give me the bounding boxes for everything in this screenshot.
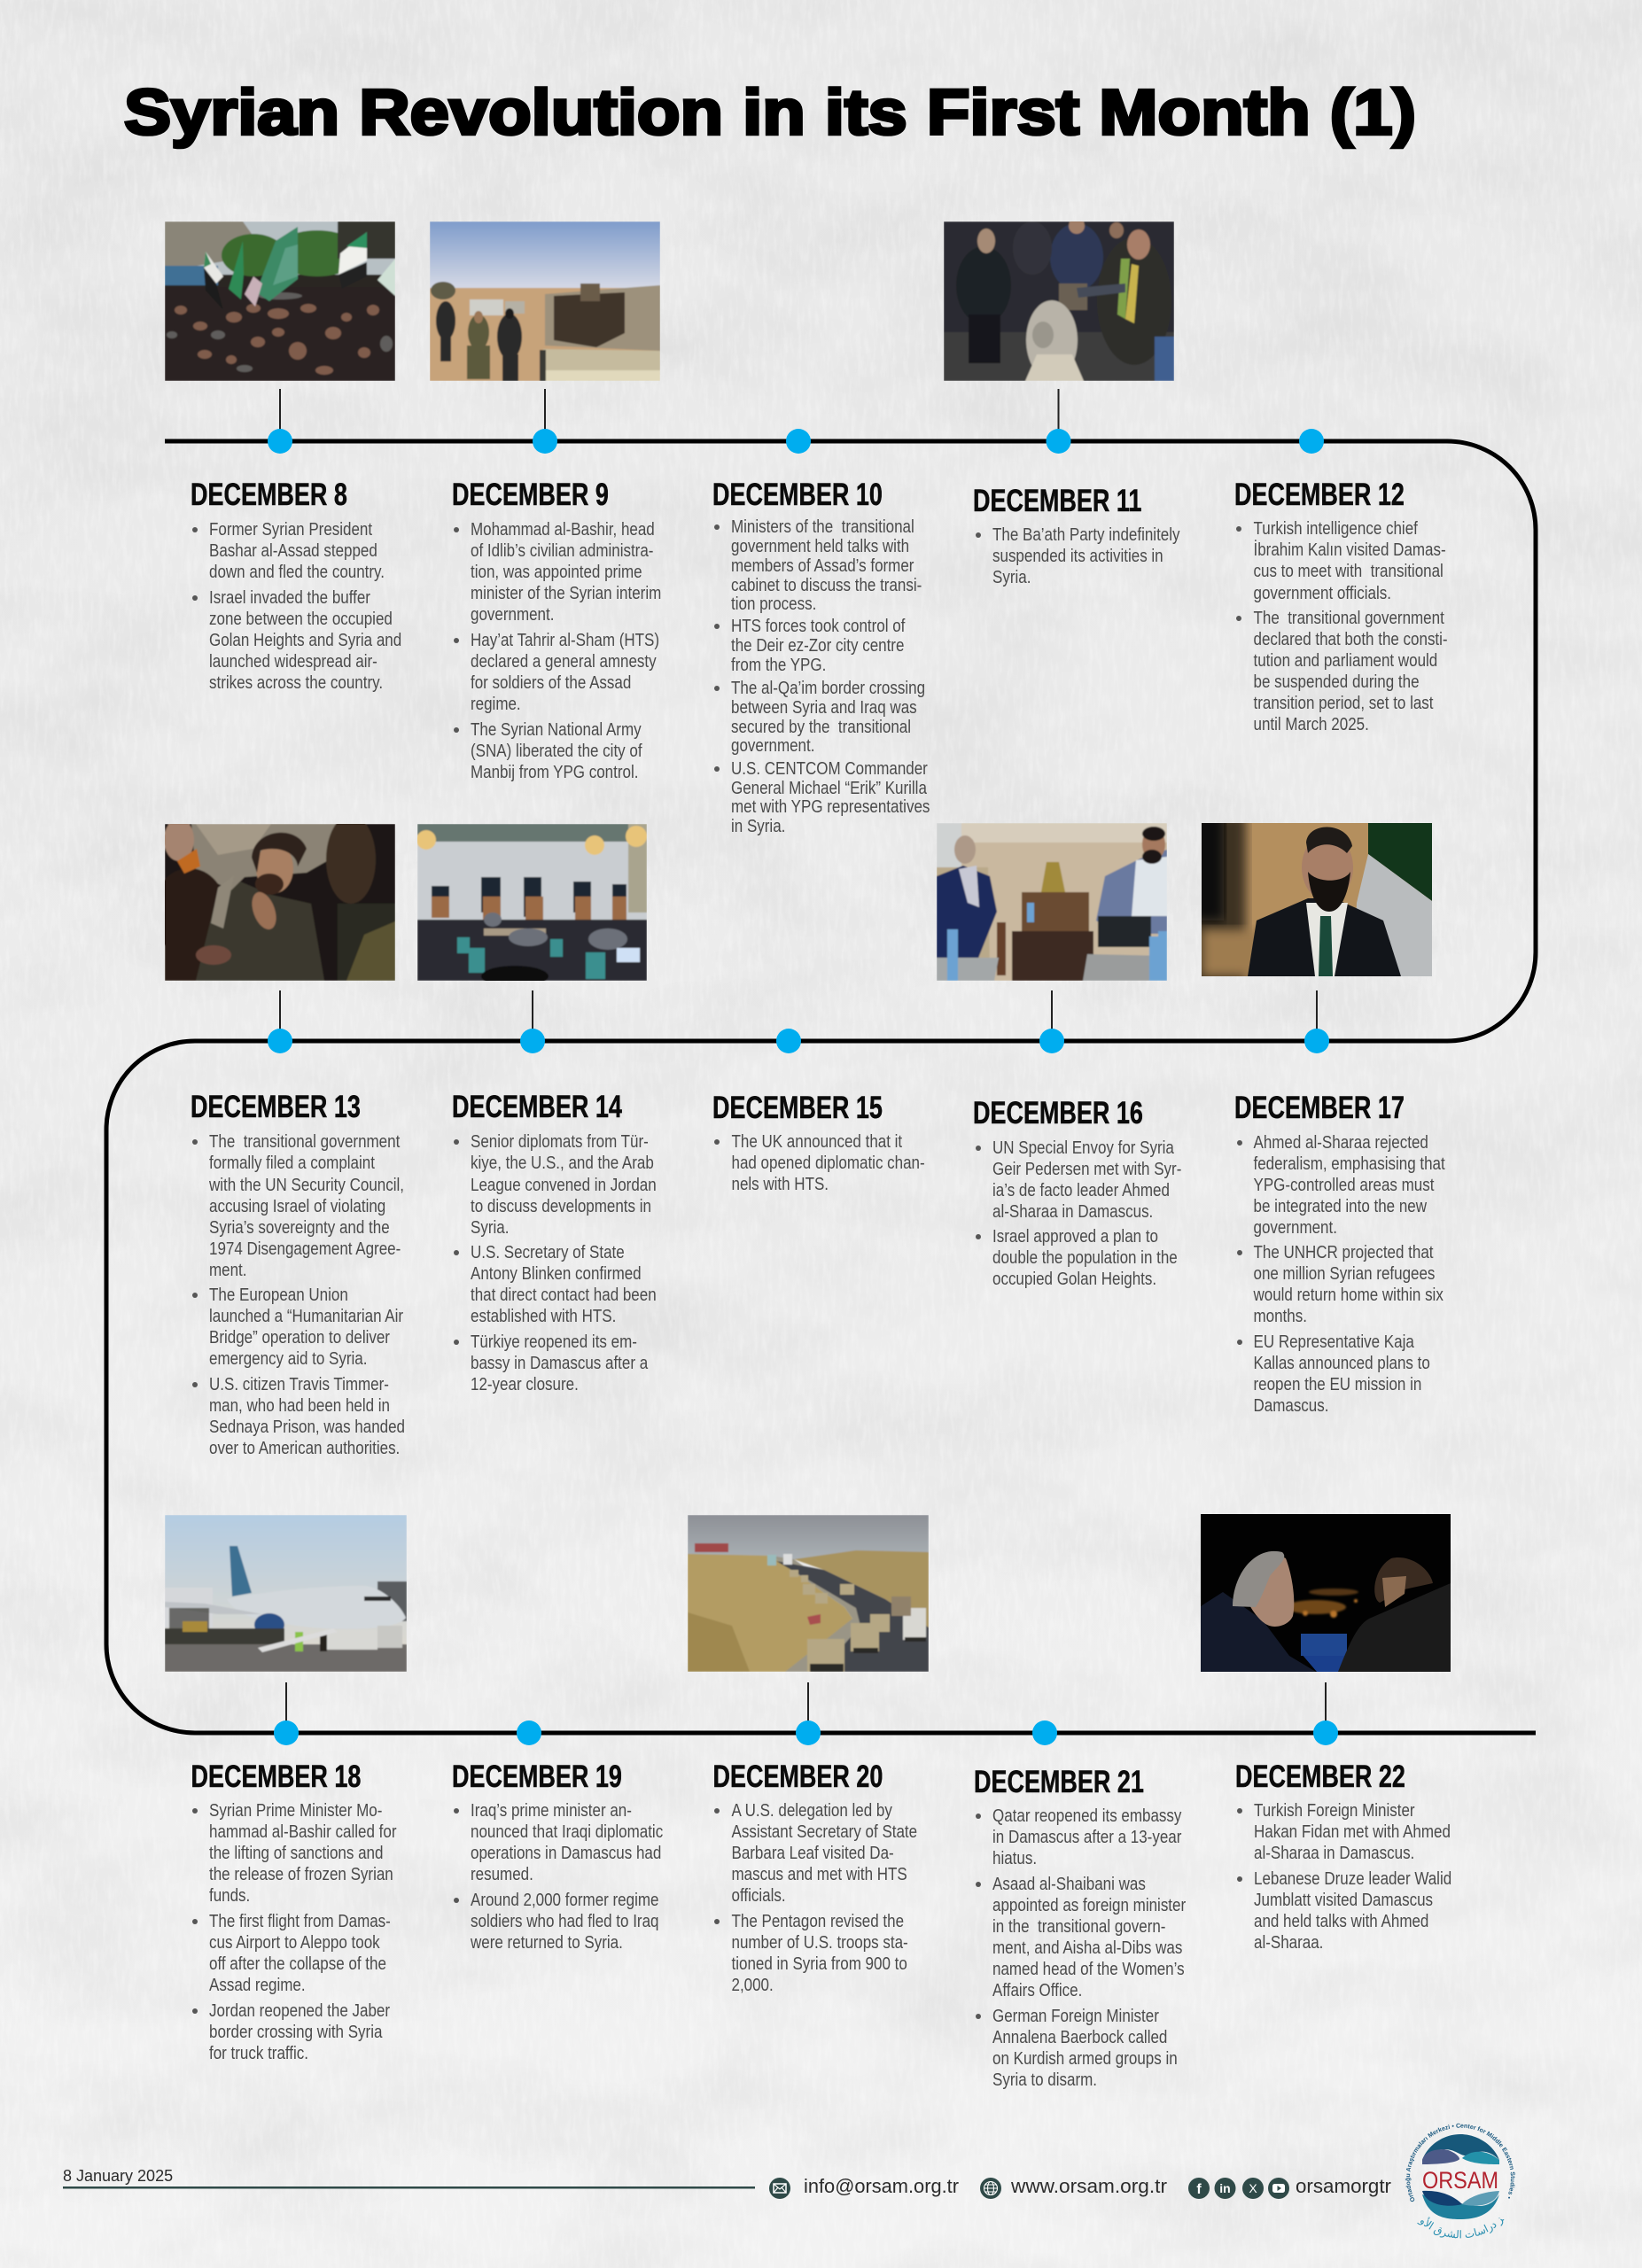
- text block: nounced that Iraqi diplomatic: [471, 1821, 663, 1841]
- text block: Syria to disarm.: [992, 2070, 1097, 2089]
- panel: December 14: [452, 1088, 657, 1394]
- text block: in the transitional govern-: [992, 1916, 1165, 1936]
- photo: Syrian Air plane: [165, 1515, 407, 1672]
- text block: with the UN Security Council,: [208, 1175, 404, 1194]
- text block: down and fled the country.: [209, 562, 385, 581]
- text block: Ahmed al-Sharaa rejected: [1253, 1132, 1428, 1152]
- panel: December 8: [191, 476, 401, 692]
- bullets: [1237, 1808, 1242, 1882]
- text block: the Deir ez-Zor city centre: [731, 635, 904, 655]
- text block: The UNHCR projected that: [1253, 1242, 1434, 1262]
- website: www.orsam.org.tr: [1010, 2175, 1167, 2197]
- text block: Jumblatt visited Damascus: [1254, 1890, 1433, 1909]
- text block: Hakan Fidan met with Ahmed: [1254, 1821, 1451, 1841]
- bullets: [454, 1139, 459, 1345]
- text block: The transitional government: [1253, 608, 1445, 627]
- text block: Israel invaded the buffer: [209, 587, 370, 607]
- text block: Turkish intelligence chief: [1253, 518, 1419, 538]
- text block: tioned in Syria from 900 to: [732, 1953, 907, 1973]
- panel: December 13: [191, 1088, 405, 1457]
- heading: DECEMBER 19: [452, 1758, 622, 1794]
- panel: December 20: [712, 1758, 917, 1994]
- text block: months.: [1253, 1306, 1307, 1325]
- bullets: [1237, 1140, 1242, 1345]
- panel: December 10: [712, 476, 930, 835]
- photo: night balcony talk: [1201, 1514, 1451, 1672]
- text block: launched a “Humanitarian Air: [209, 1306, 403, 1325]
- text block: from the YPG.: [731, 655, 826, 674]
- text block: Sednaya Prison, was handed: [209, 1417, 405, 1436]
- text block: Manbij from YPG control.: [471, 762, 638, 781]
- panel: December 11: [973, 482, 1180, 586]
- text block: transition period, set to last: [1253, 693, 1434, 712]
- connectors: [280, 389, 1326, 1721]
- text block: government held talks with: [731, 536, 909, 555]
- panel: December 21: [974, 1763, 1186, 2089]
- text block: Geir Pedersen met with Syr-: [992, 1159, 1181, 1178]
- text block: off after the collapse of the: [209, 1953, 386, 1973]
- icon: linkedin: in: [1219, 2181, 1231, 2195]
- text block: were returned to Syria.: [470, 1932, 623, 1952]
- text block: on Kurdish armed groups in: [992, 2048, 1178, 2068]
- text block: İbrahim Kalın visited Damas-: [1253, 540, 1446, 559]
- date: 8 January 2025: [63, 2167, 173, 2185]
- heading: DECEMBER 22: [1235, 1758, 1405, 1794]
- text block: 1974 Disengagement Agree-: [209, 1239, 401, 1258]
- text block: Barbara Leaf visited Da-: [732, 1843, 894, 1862]
- photo: Aqaba meeting: [417, 824, 647, 981]
- text block: U.S. CENTCOM Commander: [731, 758, 928, 778]
- text block: for truck traffic.: [209, 2043, 308, 2062]
- logo upper wave: [1422, 2134, 1499, 2164]
- heading: DECEMBER 13: [191, 1088, 361, 1124]
- text block: Antony Blinken confirmed: [471, 1263, 642, 1283]
- heading: DECEMBER 12: [1234, 476, 1405, 512]
- text block: kiye, the U.S., and the Arab: [471, 1153, 654, 1172]
- text block: Hay’at Tahrir al-Sham (HTS): [471, 630, 659, 649]
- text block: 12-year closure.: [471, 1374, 579, 1394]
- text block: man, who had been held in: [209, 1395, 390, 1415]
- text block: A U.S. delegation led by: [732, 1800, 892, 1820]
- text block: formally filed a complaint: [209, 1153, 376, 1172]
- text block: named head of the Women’s: [992, 1959, 1185, 1978]
- text block: bassy in Damascus after a: [471, 1353, 649, 1372]
- panel: December 12: [1234, 476, 1448, 734]
- heading: DECEMBER 14: [452, 1088, 622, 1124]
- text block: tion process.: [731, 594, 816, 613]
- icon: X: [1242, 2178, 1264, 2199]
- text block: be integrated into the new: [1253, 1196, 1428, 1216]
- text block: Qatar reopened its embassy: [992, 1806, 1182, 1825]
- text block: ment, and Aisha al-Dibs was: [992, 1938, 1182, 1957]
- bullets: [1236, 526, 1241, 621]
- text block: German Foreign Minister: [992, 2006, 1159, 2025]
- icon: X: X: [1249, 2181, 1257, 2195]
- text block: the release of frozen Syrian: [209, 1864, 393, 1884]
- photo: statue toppled: [944, 221, 1174, 381]
- text block: Syria.: [992, 567, 1031, 586]
- text block: (SNA) liberated the city of: [471, 741, 642, 760]
- text block: secured by the transitional: [731, 717, 911, 736]
- text block: declared a general amnesty: [471, 651, 657, 671]
- heading: DECEMBER 9: [452, 476, 609, 512]
- social handle: orsamorgtr: [1296, 2175, 1391, 2197]
- text block: one million Syrian refugees: [1253, 1263, 1435, 1283]
- heading: DECEMBER 21: [974, 1763, 1144, 1799]
- text block: mascus and met with HTS: [732, 1864, 907, 1884]
- text block: The Syrian National Army: [471, 719, 642, 739]
- text block: reopen the EU mission in: [1253, 1374, 1421, 1394]
- text block: over to American authorities.: [209, 1438, 400, 1457]
- text block: regime.: [471, 694, 521, 713]
- text block: Bridge” operation to deliver: [209, 1327, 390, 1347]
- icon: facebook: f: [1196, 2182, 1202, 2197]
- text block: cabinet to discuss the transi-: [731, 575, 922, 594]
- text block: The Pentagon revised the: [732, 1911, 904, 1930]
- text block: that direct contact had been: [471, 1285, 657, 1304]
- text block: border crossing with Syria: [209, 2022, 383, 2041]
- bullets: [192, 1808, 198, 2014]
- text block: hiatus.: [992, 1848, 1037, 1868]
- text block: and held talks with Ahmed: [1254, 1911, 1428, 1930]
- heading: DECEMBER 15: [712, 1089, 883, 1125]
- text block: established with HTS.: [471, 1306, 616, 1325]
- icon: youtube: [1268, 2178, 1289, 2199]
- footer rule: [63, 2186, 755, 2188]
- heading: DECEMBER 17: [1234, 1089, 1405, 1125]
- panel: December 15: [712, 1089, 925, 1193]
- text block: government officials.: [1253, 583, 1391, 602]
- text block: nels with HTS.: [732, 1174, 829, 1193]
- icon: globe: [980, 2178, 1001, 2199]
- text block: for soldiers of the Assad: [471, 672, 631, 692]
- text block: strikes across the country.: [209, 672, 383, 692]
- photo: UN envoy meeting: [937, 823, 1167, 981]
- text block: Lebanese Druze leader Walid: [1254, 1868, 1451, 1888]
- text block: The UK announced that it: [732, 1131, 903, 1151]
- text block: Asaad al-Shaibani was: [992, 1874, 1146, 1893]
- text block: cus to meet with transitional: [1253, 561, 1444, 580]
- text block: had opened diplomatic chan-: [732, 1153, 925, 1172]
- text block: Iraq’s prime minister an-: [471, 1800, 632, 1820]
- icon: email: [769, 2178, 790, 2199]
- logo wordmark: ORSAM: [1422, 2167, 1498, 2194]
- panel: December 18: [191, 1758, 396, 2062]
- logo lower wave: [1422, 2191, 1499, 2219]
- text block: ia’s de facto leader Ahmed: [992, 1180, 1170, 1200]
- text block: suspended its activities in: [992, 546, 1163, 565]
- photo: released prisoner: [165, 824, 395, 981]
- text block: Mohammad al-Bashir, head: [471, 519, 655, 539]
- text block: Syria’s sovereignty and the: [209, 1217, 390, 1237]
- text block: Former Syrian President: [209, 519, 373, 539]
- text block: federalism, emphasising that: [1253, 1153, 1445, 1173]
- text block: funds.: [209, 1885, 250, 1905]
- text block: launched widespread air-: [209, 651, 377, 671]
- text block: members of Assad’s former: [731, 555, 914, 575]
- text block: al-Sharaa.: [1254, 1932, 1323, 1952]
- text block: Syrian Prime Minister Mo-: [209, 1800, 382, 1820]
- text block: Assistant Secretary of State: [732, 1821, 917, 1841]
- bullets: [976, 532, 981, 538]
- text block: U.S. citizen Travis Timmer-: [209, 1374, 389, 1394]
- text block: The European Union: [209, 1285, 348, 1304]
- logo ring text: Ortadoğu Araştırmaları Merkezi • Center for Middle Eastern Studies •: [1405, 2123, 1515, 2202]
- text block: Ministers of the transitional: [731, 517, 914, 536]
- text block: al-Sharaa in Damascus.: [1254, 1843, 1414, 1862]
- text block: appointed as foreign minister: [992, 1895, 1186, 1915]
- text block: hammad al-Bashir called for: [209, 1821, 396, 1841]
- text block: tion, was appointed prime: [471, 562, 642, 581]
- icon: facebook: [1188, 2178, 1210, 2199]
- text block: Assad regime.: [209, 1975, 306, 1994]
- text block: 2,000.: [732, 1975, 774, 1994]
- heading: DECEMBER 20: [712, 1758, 883, 1794]
- bullets: [714, 1139, 720, 1145]
- text block: accusing Israel of violating: [209, 1196, 385, 1216]
- text block: government.: [471, 604, 554, 624]
- text block: of Idlib’s civilian administra-: [471, 540, 653, 560]
- bullets: [714, 524, 720, 772]
- text block: Senior diplomats from Tür-: [471, 1131, 649, 1151]
- text block: Jordan reopened the Jaber: [209, 2000, 390, 2020]
- text block: cus Airport to Aleppo took: [209, 1932, 380, 1952]
- text block: EU Representative Kaja: [1253, 1332, 1414, 1351]
- text block: Israel approved a plan to: [992, 1226, 1158, 1246]
- text block: double the population in the: [992, 1247, 1178, 1267]
- text block: Damascus.: [1253, 1395, 1328, 1415]
- text block: YPG-controlled areas must: [1253, 1175, 1435, 1194]
- bullets: [714, 1808, 720, 1924]
- panel: December 9: [452, 476, 661, 781]
- bullets: [976, 1146, 981, 1239]
- text block: would return home within six: [1253, 1285, 1444, 1304]
- text block: The first flight from Damas-: [209, 1911, 391, 1930]
- text block: government.: [1253, 1217, 1337, 1237]
- text block: Turkish Foreign Minister: [1254, 1800, 1415, 1820]
- text block: in Syria.: [731, 816, 785, 835]
- bullets: [976, 1814, 981, 2019]
- text block: resumed.: [471, 1864, 533, 1884]
- text block: UN Special Envoy for Syria: [992, 1138, 1174, 1157]
- text block: The Ba’ath Party indefinitely: [992, 524, 1180, 544]
- panel: December 17: [1234, 1089, 1445, 1415]
- text block: occupied Golan Heights.: [992, 1269, 1156, 1288]
- photo: US convoy: [688, 1515, 929, 1672]
- bullets: [454, 527, 459, 733]
- icon: linkedin: [1214, 2178, 1235, 2199]
- heading: DECEMBER 18: [191, 1758, 361, 1794]
- text block: Kallas announced plans to: [1253, 1353, 1430, 1372]
- logo Arabic ring text: مركز دراسات الشرق الأوسط: [1417, 2217, 1505, 2238]
- footer: [63, 2167, 1391, 2199]
- text block: General Michael “Erik” Kurilla: [731, 778, 928, 797]
- text block: between Syria and Iraq was: [731, 697, 917, 717]
- text block: The transitional government: [209, 1131, 401, 1151]
- heading: DECEMBER 11: [973, 482, 1141, 518]
- panel: December 16: [973, 1094, 1181, 1288]
- text block: U.S. Secretary of State: [471, 1242, 625, 1262]
- text block: Türkiye reopened its em-: [471, 1332, 637, 1351]
- text block: number of U.S. troops sta-: [732, 1932, 908, 1952]
- text block: Syria.: [471, 1217, 509, 1237]
- panel: December 22: [1235, 1758, 1451, 1952]
- email: info@orsam.org.tr: [804, 2175, 959, 2197]
- text block: in Damascus after a 13-year: [992, 1827, 1181, 1846]
- text block: ment.: [209, 1260, 246, 1279]
- text block: operations in Damascus had: [471, 1843, 661, 1862]
- timeline path: [106, 441, 1536, 1733]
- text block: Bashar al-Assad stepped: [209, 540, 377, 560]
- text block: HTS forces took control of: [731, 616, 906, 635]
- bullets: [192, 1139, 198, 1387]
- text block: Around 2,000 former regime: [471, 1890, 658, 1909]
- text block: to discuss developments in: [471, 1196, 651, 1216]
- bullets: [192, 527, 198, 601]
- text block: minister of the Syrian interim: [471, 583, 661, 602]
- text block: officials.: [732, 1885, 786, 1905]
- text block: Annalena Baerbock called: [992, 2027, 1167, 2047]
- photo: crowd with flags: [165, 221, 395, 381]
- text block: Affairs Office.: [992, 1980, 1082, 2000]
- text block: Golan Heights and Syria and: [209, 630, 401, 649]
- heading: DECEMBER 8: [191, 476, 347, 512]
- panel: December 19: [452, 1758, 663, 1952]
- text block: tution and parliament would: [1253, 650, 1437, 670]
- text block: the lifting of sanctions and: [209, 1843, 383, 1862]
- heading: DECEMBER 16: [973, 1094, 1143, 1130]
- title: Syrian Revolution in its First Month (1): [124, 78, 1416, 149]
- heading: DECEMBER 10: [712, 476, 883, 512]
- text block: zone between the occupied: [209, 609, 393, 628]
- text block: soldiers who had fled to Iraq: [471, 1911, 658, 1930]
- text block: government.: [731, 735, 814, 755]
- text block: until March 2025.: [1253, 714, 1369, 734]
- text block: declared that both the consti-: [1253, 629, 1448, 649]
- text block: emergency aid to Syria.: [209, 1348, 367, 1368]
- timeline dots: [268, 429, 1338, 1745]
- bullets: [454, 1808, 459, 1903]
- text block: The al-Qa’im border crossing: [731, 678, 925, 697]
- text block: League convened in Jordan: [471, 1175, 657, 1194]
- text block: be suspended during the: [1253, 672, 1420, 691]
- photo: fighters with vehicle: [430, 221, 660, 381]
- text block: al-Sharaa in Damascus.: [992, 1201, 1153, 1221]
- photo: Ahmed al-Sharaa: [1202, 823, 1432, 976]
- text block: met with YPG representatives: [731, 796, 930, 816]
